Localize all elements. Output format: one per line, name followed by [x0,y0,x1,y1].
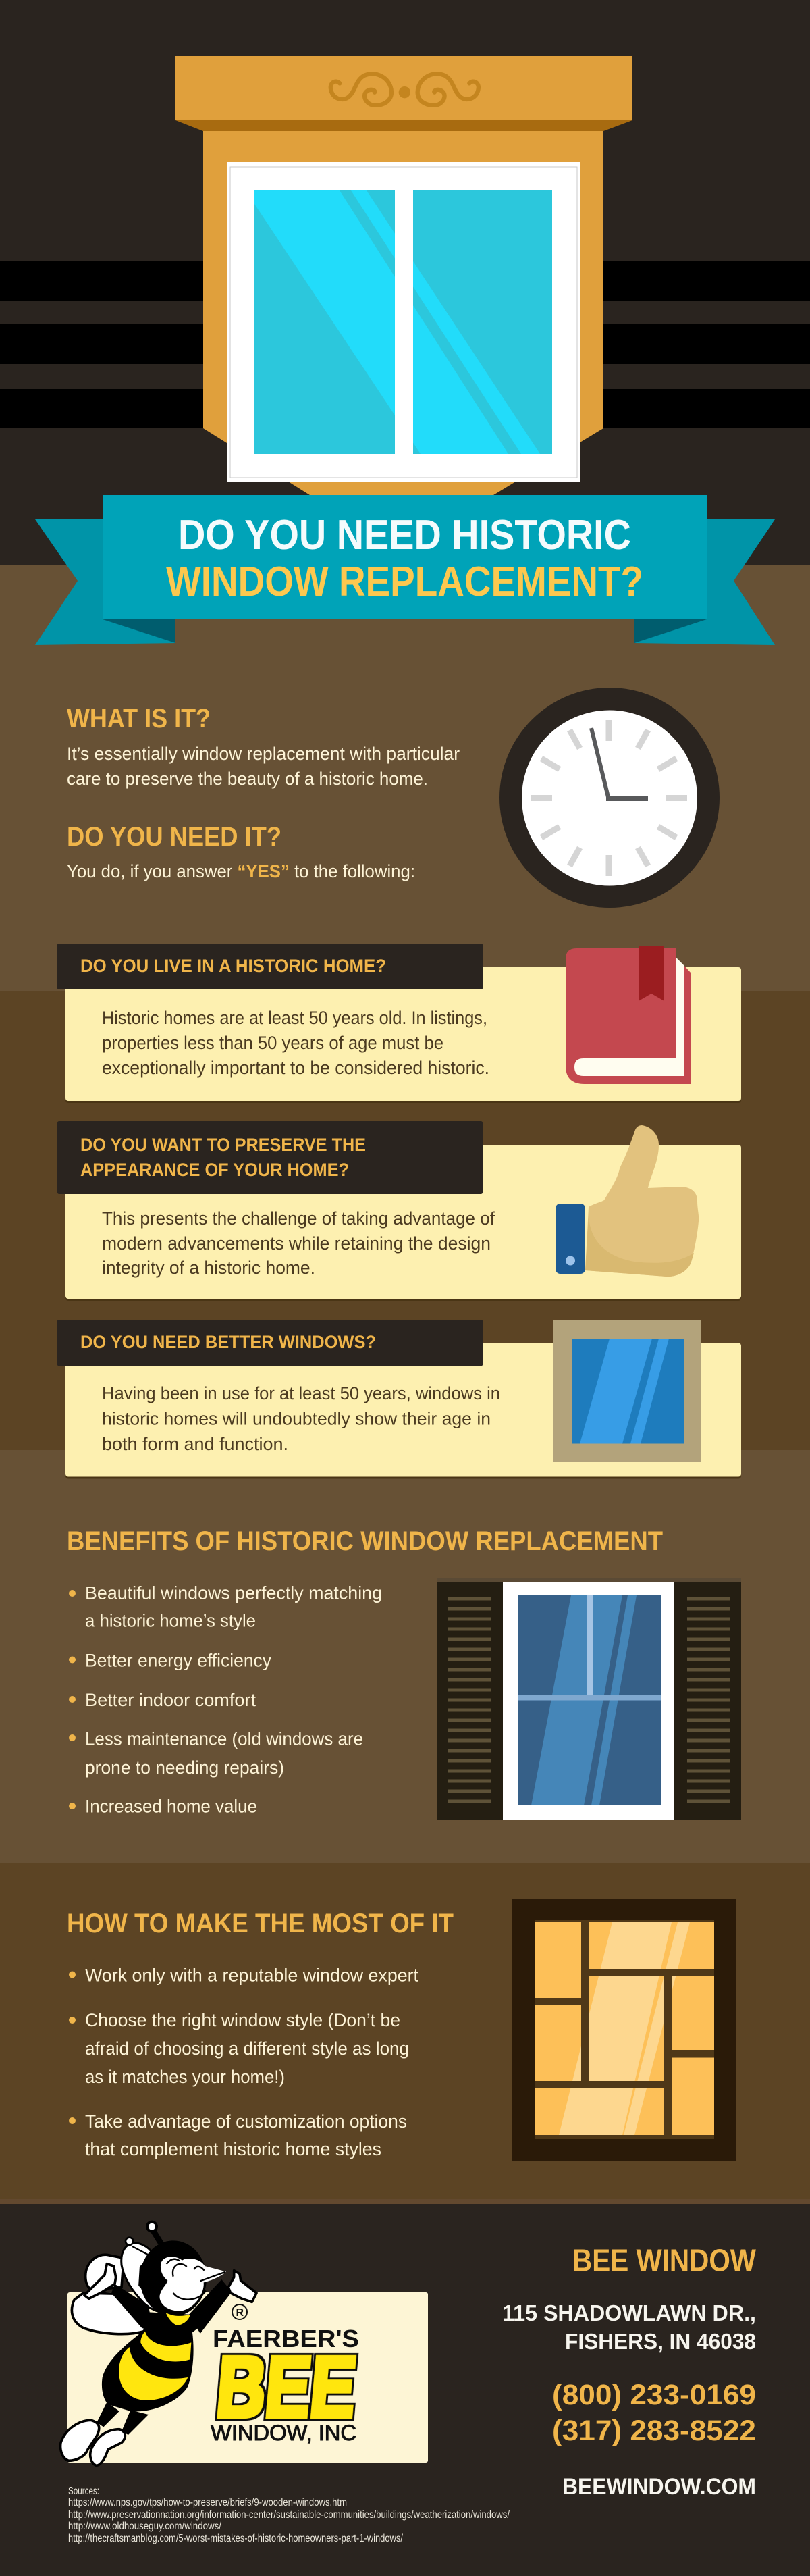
benefits list: Better indoor comfort [85,1690,256,1710]
sources: http://www.oldhouseguy.com/windows/ [68,2521,222,2532]
left pane [254,190,395,454]
logo wordmark: BEE [213,2339,360,2436]
heading: how to make the most of it: HOW TO MAKE THE MOST OF IT [67,1909,454,1938]
body text: both form and function. [102,1434,288,1454]
intro: what is it: It’s essentially window replacement with particular [67,744,460,764]
sources: http://www.preservationnation.org/information-center/sustainable-communities/buildings/weatherization/windows/ [68,2509,510,2521]
sources: http://thecraftsmanblog.com/5-worst-mistakes-of-historic-homeowners-part-1-windows/ [68,2533,404,2544]
logo background [68,2292,428,2463]
body text [102,1383,500,1454]
glass reflections [254,190,395,415]
intro: do you need it [67,822,415,881]
ornament [331,74,479,105]
cornice [176,56,632,120]
tips list: Choose the right window style (Don’t be [85,2010,400,2030]
tips list: that complement historic home styles [85,2139,381,2159]
tips list: as it matches your home!) [85,2067,285,2087]
title ribbon [35,495,775,645]
label bar [57,1121,483,1194]
benefits list: Beautiful windows perfectly matching [85,1583,382,1603]
icon: amber paned window [512,1899,736,2161]
mascot: bee [61,2221,256,2465]
body text: integrity of a historic home. [102,1258,315,1278]
title text [166,512,643,605]
footer logo panel [61,2221,428,2465]
right pane [413,190,552,454]
icon: shuttered window [437,1578,741,1820]
intro: do you need it: You do, if you answer “YES” to the following: [67,861,415,881]
title text: DO YOU NEED HISTORIC [178,512,631,559]
sources: https://www.nps.gov/tps/how-to-preserve/briefs/9-wooden-windows.htm [68,2497,347,2508]
logo wordmark: WINDOW, INC [211,2421,356,2445]
contact details: 115 SHADOWLAWN DR., [502,2300,756,2325]
body text: historic homes will undoubtedly show their age in [102,1409,491,1429]
window sash [227,162,580,482]
body text [102,1208,495,1278]
label bar: APPEARANCE OF YOUR HOME? [80,1160,349,1180]
sources: Sources: [68,2485,99,2497]
body text: This presents the challenge of taking advantage of [102,1208,495,1229]
sources [68,2485,510,2544]
intro: what is it: WHAT IS IT? [67,704,211,733]
intro: do you need it: DO YOU NEED IT? [67,822,281,852]
body text: properties less than 50 years of age must be [102,1033,443,1053]
benefits list: Less maintenance (old windows are [85,1729,363,1749]
icon: clock [500,688,720,908]
body text: Having been in use for at least 50 years, windows in [102,1383,500,1403]
benefits list [69,1583,382,1817]
panel: preserve appearance question [57,1121,741,1301]
tips list [69,1965,418,2159]
benefits list: a historic home’s style [85,1610,256,1630]
icon: book [566,946,691,1084]
intro: what is it: care to preserve the beauty of a historic home. [67,769,428,789]
contact details [502,2242,757,2500]
label bar: DO YOU WANT TO PRESERVE THE [80,1135,366,1155]
contact details: BEE WINDOW [572,2242,757,2277]
logo wordmark [211,2325,360,2445]
icon: thumbs up [556,1125,699,1277]
logo wordmark: FAERBER'S [213,2325,359,2352]
body text [102,1008,489,1078]
benefits list: prone to needing repairs) [85,1757,284,1778]
title text: WINDOW REPLACEMENT? [166,559,643,605]
contact details: BEEWINDOW.COM [562,2474,756,2500]
intro: what is it [67,704,460,789]
label bar [57,1320,483,1366]
frame body [203,130,603,495]
label bar: DO YOU NEED BETTER WINDOWS? [80,1332,376,1352]
hero illustration: window with ornamental frame [176,56,632,495]
registered mark: R [236,2307,244,2319]
cornice shadow [176,120,632,131]
body text: modern advancements while retaining the design [102,1233,491,1254]
contact details: (800) 233-0169 [552,2379,756,2411]
tips list: afraid of choosing a different style as long [85,2038,409,2059]
panel: better windows question [57,1320,741,1479]
label bar [57,944,483,989]
panel: historic home question [57,944,741,1103]
registered mark [232,2304,247,2319]
benefits list: Increased home value [85,1797,257,1817]
icon: small window [554,1320,701,1462]
tips list: Work only with a reputable window expert [85,1965,418,1986]
tips list: Take advantage of customization options [85,2111,407,2132]
benefits list: Better energy efficiency [85,1651,271,1671]
contact details: FISHERS, IN 46038 [565,2329,756,2354]
contact details: (317) 283-8522 [552,2415,756,2447]
heading: benefits: BENEFITS OF HISTORIC WINDOW REPLACEMENT [67,1526,663,1556]
body text: Historic homes are at least 50 years old. In listings, [102,1008,487,1028]
label bar: DO YOU LIVE IN A HISTORIC HOME? [80,956,386,976]
body text: exceptionally important to be considered historic. [102,1058,489,1078]
